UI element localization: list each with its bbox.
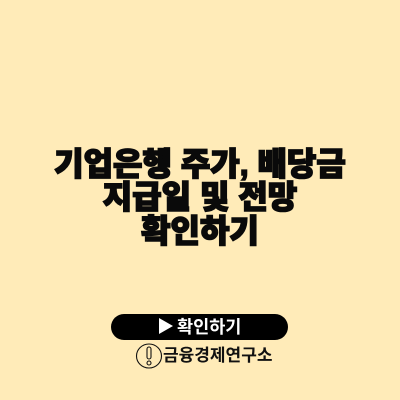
- title: 지급일 및 전망: [103, 179, 297, 215]
- icon: play triangle: [159, 318, 173, 334]
- brand: logo and name: [136, 344, 272, 368]
- button label: 확인하기: [177, 317, 241, 337]
- title: [54, 146, 346, 249]
- brand name: 금융경제연구소: [163, 346, 272, 365]
- title: 기업은행 주가, 배당금: [54, 146, 346, 182]
- icon: exclamation circle: [136, 344, 162, 368]
- title: 확인하기: [141, 213, 259, 249]
- button: confirm: [111, 314, 288, 340]
